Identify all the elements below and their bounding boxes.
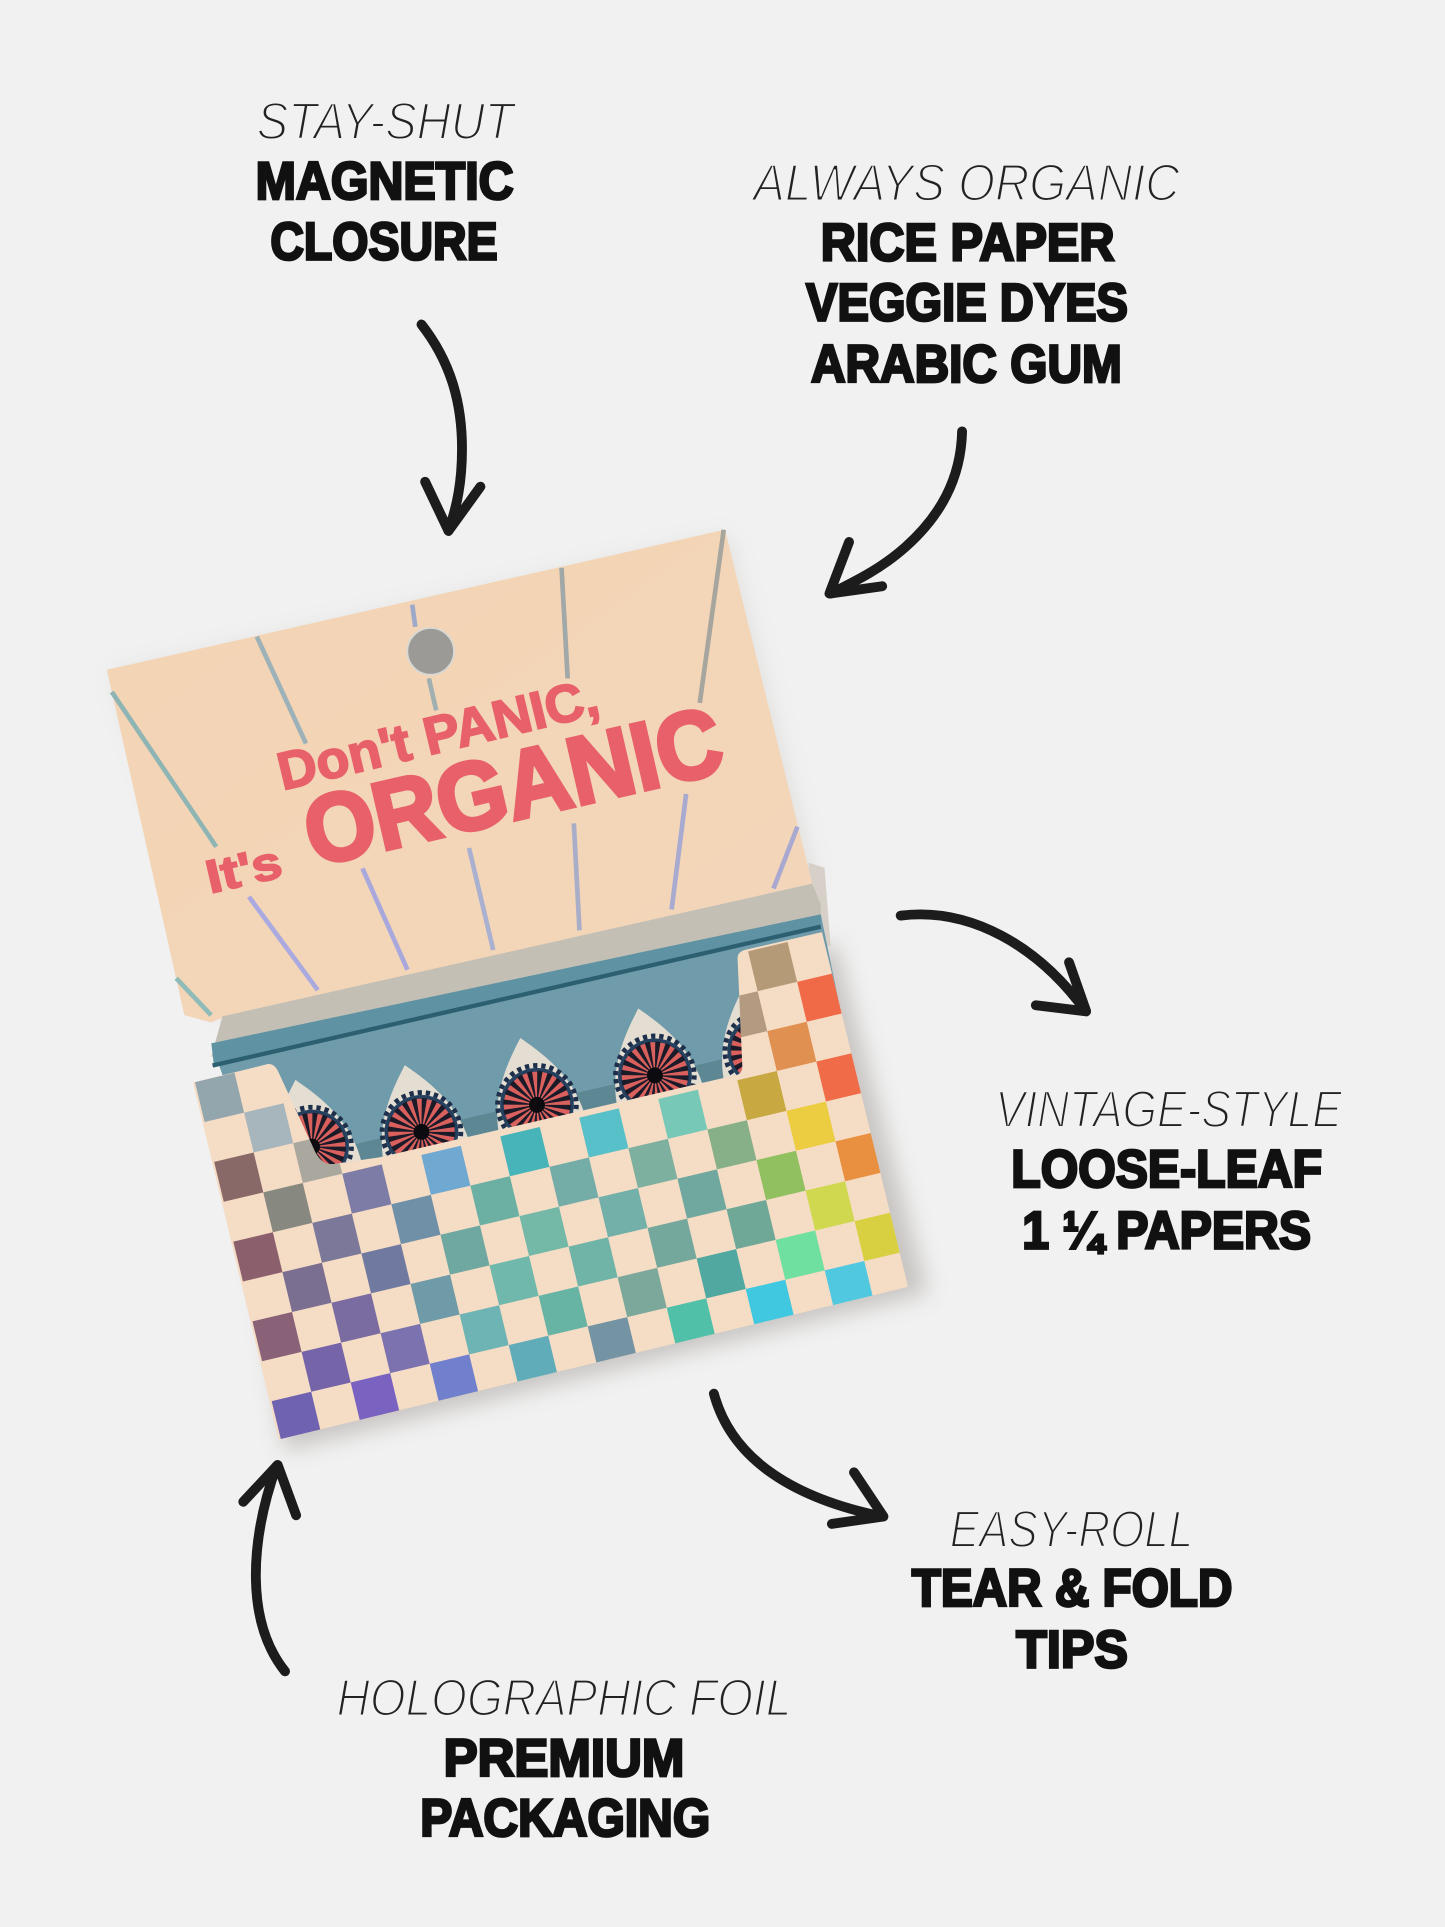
callout: always organic ingredients: VEGGIE DYES: [806, 274, 1128, 333]
foil rays: [112, 530, 797, 1015]
inner grey fold: [211, 884, 821, 1057]
flap slogan ORGANIC: ORGANIC: [294, 687, 732, 887]
callout: always organic ingredients: ARABIC GUM: [811, 335, 1122, 394]
icon: magnet closure: [407, 628, 454, 675]
callout: always organic ingredients: [750, 153, 1180, 394]
callout: stay-shut magnetic closure: CLOSURE: [270, 212, 498, 271]
callout: holographic foil packaging: PACKAGING: [420, 1789, 710, 1848]
callout: easy-roll tips: TIPS: [1016, 1621, 1128, 1680]
arrow: to tear and fold tips: [714, 1394, 883, 1524]
arrow: to loose-leaf papers: [901, 914, 1086, 1011]
callout: easy-roll tips: [912, 1500, 1232, 1680]
flap slogan line 1: Don't PANIC,: [272, 668, 604, 802]
callout: holographic foil packaging: HOLOGRAPHIC FOIL: [337, 1669, 791, 1727]
callout: always organic ingredients: RICE PAPER: [821, 214, 1114, 273]
callout: stay-shut magnetic closure: [256, 92, 517, 271]
foil checker squares: [195, 933, 913, 1441]
right inner edge: [809, 863, 831, 946]
callout: vintage-style papers: LOOSE-LEAF: [1011, 1140, 1322, 1199]
callout: holographic foil packaging: [337, 1669, 791, 1848]
panel: top flap: [107, 530, 812, 1022]
callout: vintage-style papers: [995, 1080, 1342, 1261]
flap slogan line 2: It's: [201, 835, 287, 903]
flap shadow: [113, 536, 816, 1020]
callout: easy-roll tips: EASY-ROLL: [950, 1500, 1193, 1558]
arrow: to pack contents: [829, 431, 962, 594]
callout: vintage-style papers: 1 ¼ PAPERS: [1022, 1202, 1311, 1261]
panel: teal rolling papers: [211, 914, 860, 1211]
callout: easy-roll tips: TEAR & FOLD: [912, 1559, 1232, 1618]
arrow: to magnetic closure: [421, 324, 480, 531]
product: open holographic rolling paper pack: [107, 529, 934, 1456]
callout: holographic foil packaging: PREMIUM: [444, 1729, 684, 1788]
panel: checkered holographic pocket: [193, 932, 908, 1440]
callout: vintage-style papers: VINTAGE-STYLE: [995, 1080, 1342, 1138]
arrow: to holographic foil: [243, 1465, 296, 1671]
pocket shadow: [233, 944, 928, 1450]
callout: always organic ingredients: ALWAYS ORGANIC: [750, 153, 1180, 211]
callout: stay-shut magnetic closure: STAY-SHUT: [257, 92, 517, 150]
callout: stay-shut magnetic closure: MAGNETIC: [256, 152, 514, 211]
paper petals and wheels: [253, 973, 811, 1186]
